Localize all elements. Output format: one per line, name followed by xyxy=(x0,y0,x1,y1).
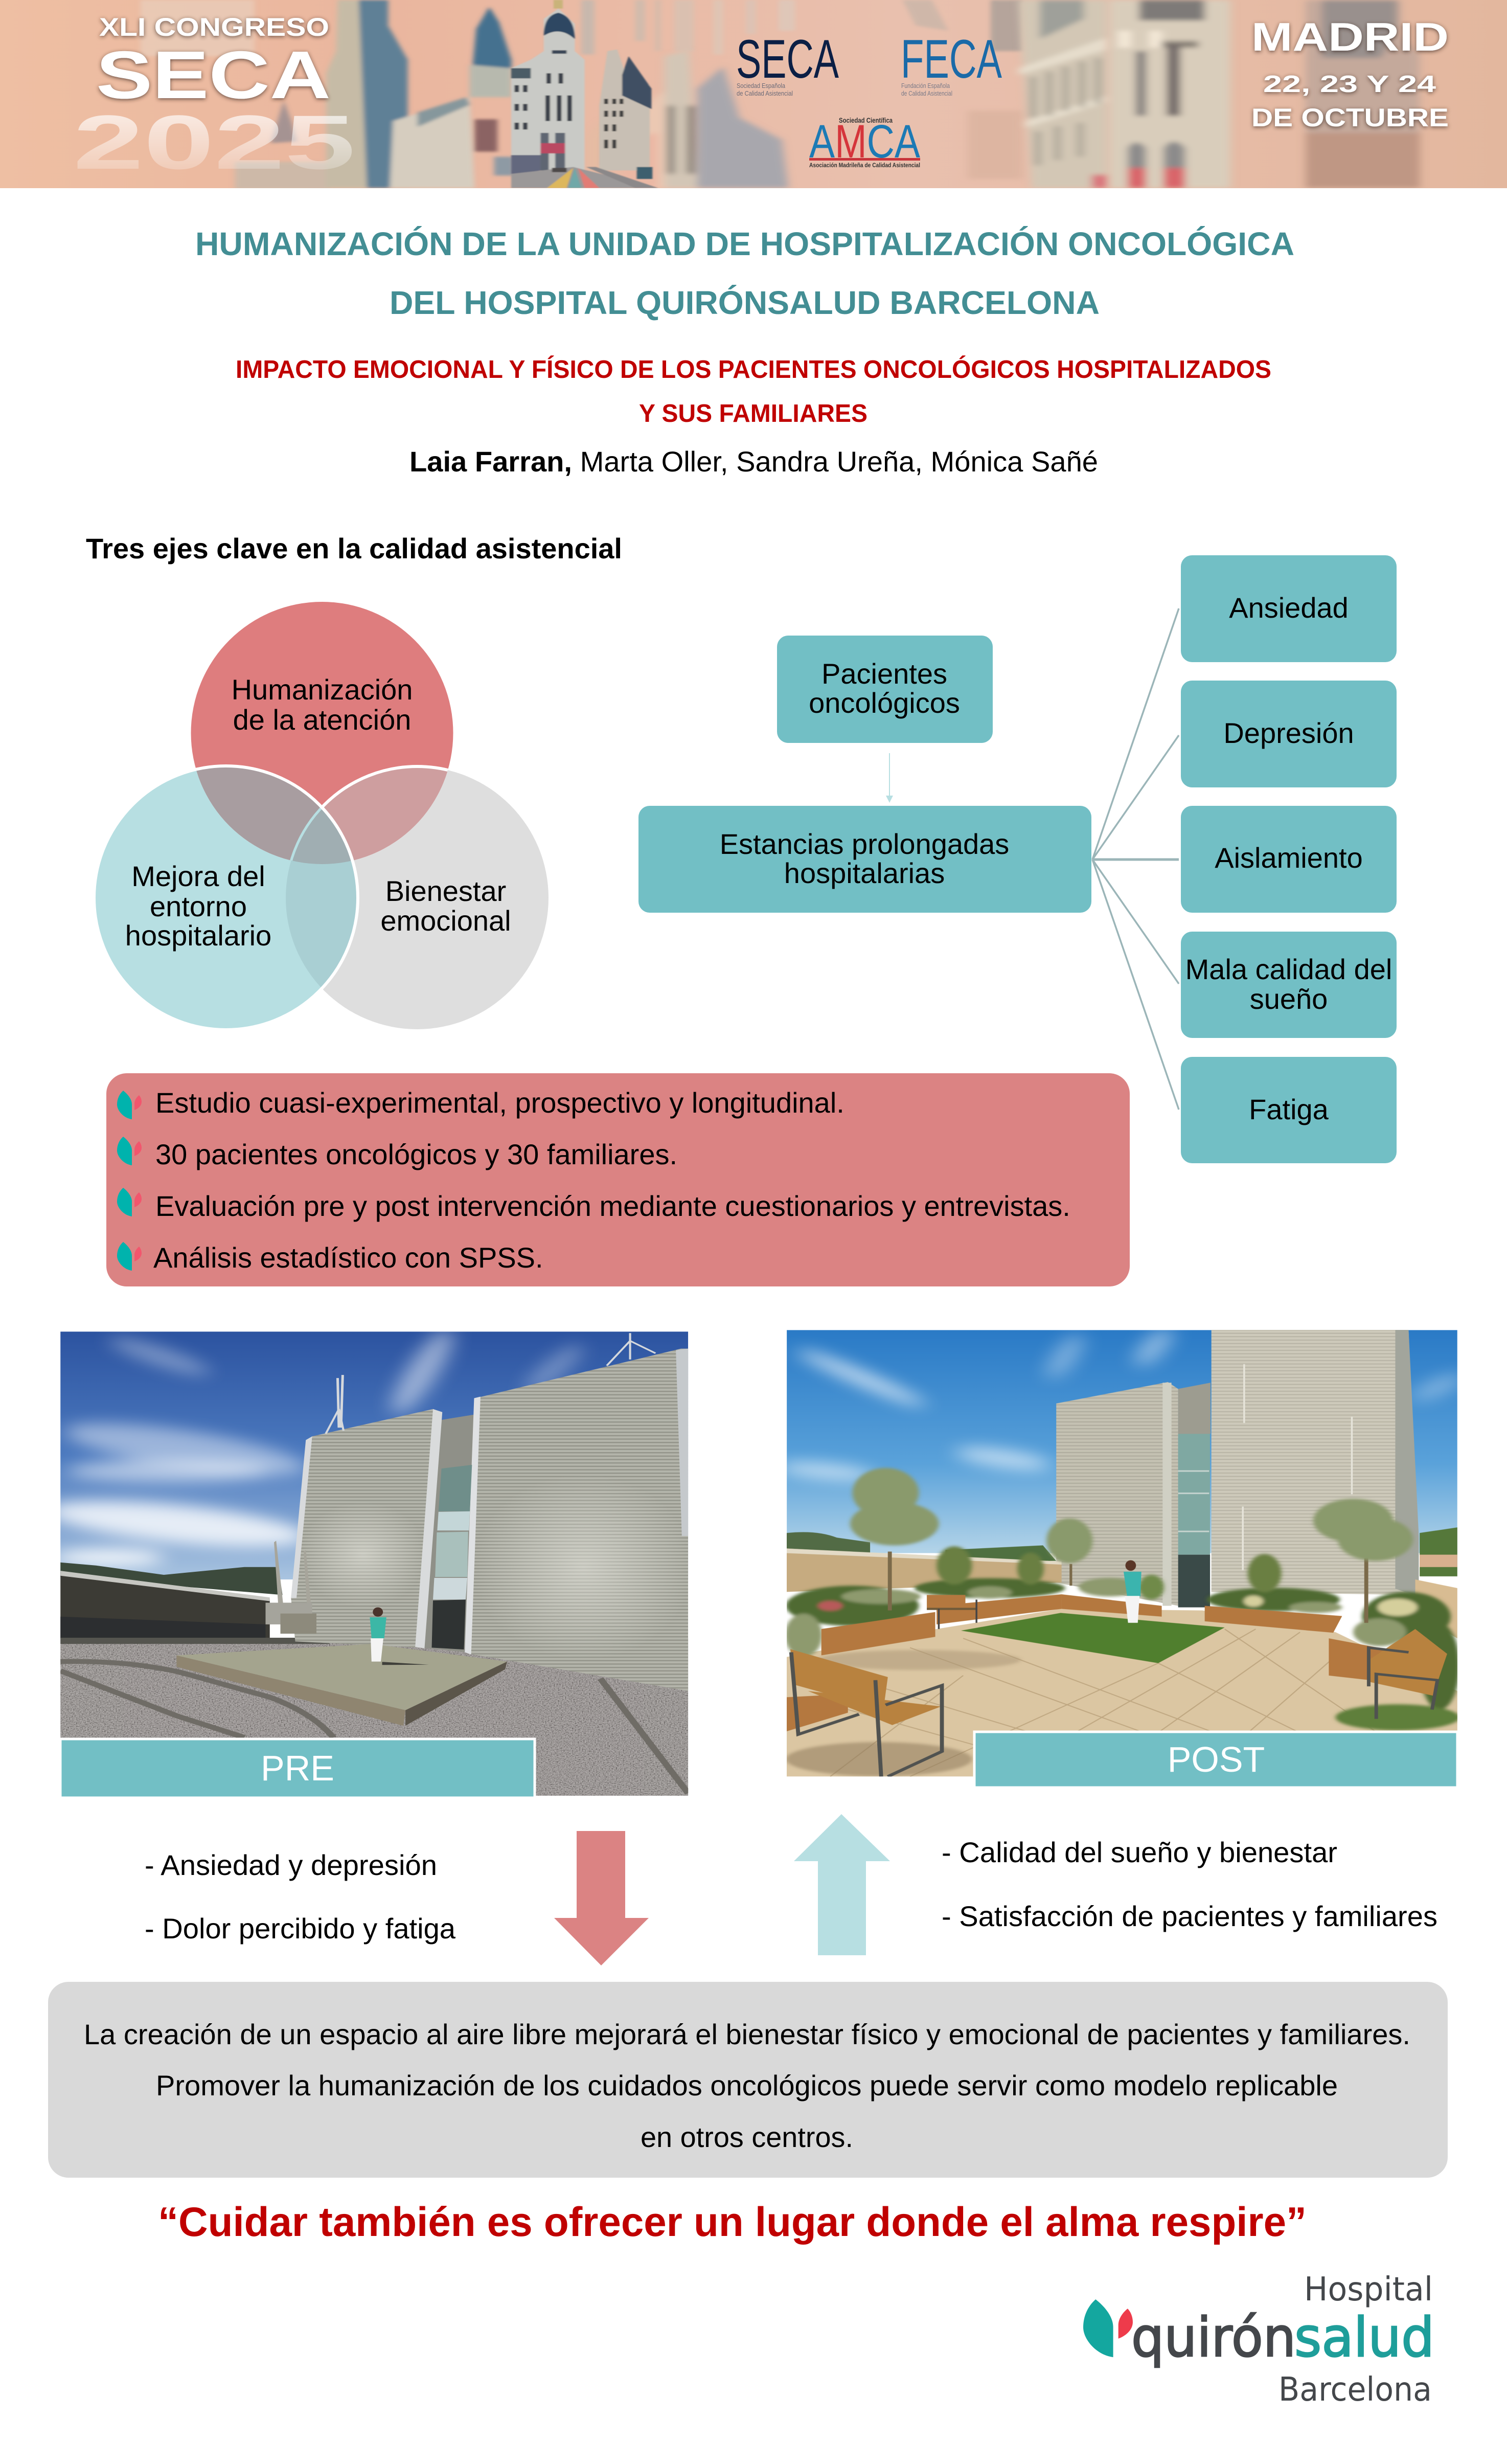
authors: Laia Farran, Marta Oller, Sandra Ureña, Mónica Sañé xyxy=(409,445,1098,478)
box: estancias prolongadas xyxy=(638,806,1091,913)
label: PRE xyxy=(60,1739,535,1798)
venn diagram xyxy=(94,602,549,1030)
planting xyxy=(785,1575,1459,1730)
trees xyxy=(850,1468,1413,1623)
flow diagram xyxy=(638,555,1397,1163)
box: mala calidad del sueño: sueño xyxy=(1250,983,1328,1015)
congress year: 2025 xyxy=(73,99,355,185)
logo: AMCA: Sociedad Científica xyxy=(839,116,893,124)
logo mark xyxy=(1083,2299,1133,2357)
rails xyxy=(60,1661,688,1793)
text: post outcomes xyxy=(942,1836,1437,1932)
box: aislamiento: Aislamiento xyxy=(1215,842,1363,874)
label: PRE: PRE xyxy=(261,1748,334,1788)
congress title: SECA xyxy=(96,37,331,112)
venn label: humanización: Humanización xyxy=(232,673,413,706)
arrow: down xyxy=(554,1831,649,1965)
text: pre outcomes: - Ansiedad y depresión xyxy=(145,1849,437,1881)
logo: SECA: Sociedad Española xyxy=(737,82,786,89)
congress title xyxy=(96,13,331,112)
logo: SECA: de Calidad Asistencial xyxy=(737,89,793,97)
platform xyxy=(176,1644,507,1710)
box: aislamiento xyxy=(1181,806,1397,913)
box: mala calidad del sueño xyxy=(1181,932,1397,1038)
venn label: humanización: de la atención xyxy=(233,704,411,736)
congress title: XLI CONGRESO xyxy=(99,13,329,41)
quote: “Cuidar también es ofrecer un lugar donde el alma respire” xyxy=(158,2199,1307,2245)
header illustration: Madrid buildings, right xyxy=(1019,0,1420,188)
subtitle: IMPACTO EMOCIONAL Y FÍSICO DE LOS PACIENTES ONCOLÓGICOS HOSPITALIZADOS xyxy=(236,355,1271,383)
photo: post intervention garden xyxy=(776,1325,1469,1776)
method item 4: Análisis estadístico con SPSS. xyxy=(153,1241,543,1274)
panel: methods xyxy=(106,1073,1130,1286)
venue and dates xyxy=(1251,14,1449,132)
panel: conclusion: en otros centros. xyxy=(641,2121,853,2153)
logo wordmark: quirón xyxy=(1131,2306,1296,2369)
facade xyxy=(1056,1382,1178,1606)
paving xyxy=(787,1609,1457,1776)
text: pre outcomes xyxy=(145,1849,456,1945)
panel: conclusion xyxy=(48,1982,1448,2178)
box: pacientes oncológicos xyxy=(777,636,993,743)
venn label: entorno: entorno xyxy=(150,890,247,922)
header banner xyxy=(0,0,1507,189)
lawn xyxy=(961,1613,1225,1663)
title: DEL HOSPITAL QUIRÓNSALUD BARCELONA xyxy=(390,284,1100,321)
logo: SECA xyxy=(736,28,839,97)
panel: conclusion: La creación de un espacio al aire libre mejorará el bienestar físico y emocional de pacientes y familiares. xyxy=(84,2018,1410,2050)
subtitle xyxy=(236,355,1271,427)
logo: FECA xyxy=(901,28,1002,97)
logo: FECA: FECA xyxy=(901,28,1002,89)
header illustration: Madrid buildings, left xyxy=(140,0,514,189)
benches xyxy=(790,1595,1447,1776)
box: pacientes oncológicos: oncológicos xyxy=(809,687,960,719)
venn label: bienestar xyxy=(380,875,511,937)
box: depresión xyxy=(1181,681,1397,787)
section heading: three axes: Tres ejes clave en la calidad asistencial xyxy=(86,532,622,564)
planters xyxy=(787,1594,1411,1731)
venue and dates: MADRID xyxy=(1251,14,1449,59)
antenna xyxy=(326,1333,655,1434)
box: mala calidad del sueño: Mala calidad del xyxy=(1185,953,1392,985)
method item 2: 30 pacientes oncológicos y 30 familiares. xyxy=(155,1138,677,1170)
logo: FECA: Fundación Española xyxy=(901,82,950,89)
box: ansiedad: Ansiedad xyxy=(1229,592,1349,624)
venn label: bienestar: Bienestar xyxy=(385,875,506,907)
method item 3: Evaluación pre y post intervención mediante cuestionarios y entrevistas. xyxy=(155,1190,1070,1222)
arrow: up xyxy=(794,1814,890,1955)
box: fatiga: Fatiga xyxy=(1249,1093,1329,1125)
venn label: entorno: hospitalario xyxy=(125,919,271,952)
bullet icon 4 xyxy=(117,1242,142,1271)
subtitle: Y SUS FAMILIARES xyxy=(639,400,867,427)
box: estancias prolongadas: Estancias prolongadas xyxy=(720,828,1009,860)
connector lines xyxy=(1092,608,1179,1110)
venn label: bienestar: emocional xyxy=(380,905,511,937)
venn label: entorno: Mejora del xyxy=(131,860,265,892)
bullet icon 2 xyxy=(117,1137,142,1165)
logo wordmark xyxy=(1131,2271,1434,2409)
label: POST: POST xyxy=(1168,1739,1265,1779)
venn label: humanización xyxy=(232,673,413,736)
logo: SECA: SECA xyxy=(736,28,839,89)
box: ansiedad xyxy=(1181,555,1397,662)
staff member xyxy=(1124,1560,1141,1623)
panel: conclusion: Promover la humanización de los cuidados oncológicos puede servir como modelo replicable xyxy=(156,2069,1338,2101)
photo: pre intervention rooftop xyxy=(43,1325,694,1796)
text: pre outcomes: - Dolor percibido y fatiga xyxy=(145,1912,456,1945)
logo wordmark: Hospital xyxy=(1304,2271,1433,2309)
staff member xyxy=(370,1608,429,1665)
garden wall xyxy=(787,1548,1062,1592)
box: fatiga xyxy=(1181,1057,1397,1163)
logo wordmark: salud xyxy=(1294,2306,1434,2369)
logo: AMCA: Asociación Madrileña de Calidad Asistencial xyxy=(809,162,920,169)
machine xyxy=(265,1541,316,1634)
method item 1: Estudio cuasi-experimental, prospectivo y longitudinal. xyxy=(155,1087,844,1119)
label: POST xyxy=(974,1732,1457,1788)
facade xyxy=(291,1409,442,1647)
arrow: patients to long stays xyxy=(886,753,893,803)
venue and dates: 22, 23 Y 24 xyxy=(1263,71,1436,97)
text: post outcomes: - Calidad del sueño y bienestar xyxy=(942,1836,1337,1868)
logo: AMCA: AMCA xyxy=(809,116,921,168)
venue and dates: DE OCTUBRE xyxy=(1251,103,1449,132)
logo: FECA: de Calidad Asistencial xyxy=(901,89,952,97)
title xyxy=(195,225,1294,321)
box: pacientes oncológicos: Pacientes xyxy=(821,658,947,690)
box: depresión: Depresión xyxy=(1223,717,1354,749)
title: HUMANIZACIÓN DE LA UNIDAD DE HOSPITALIZACIÓN ONCOLÓGICA xyxy=(195,225,1294,262)
header illustration: Madrid buildings, centre xyxy=(511,0,1022,188)
box: estancias prolongadas: hospitalarias xyxy=(784,857,945,889)
logo: hospital quirónsalud xyxy=(1083,2271,1434,2409)
text: post outcomes: - Satisfacción de pacientes y familiares xyxy=(942,1900,1437,1932)
venn label: entorno xyxy=(125,860,271,952)
bullet icon 1 xyxy=(117,1091,142,1119)
logo wordmark: Barcelona xyxy=(1278,2371,1432,2409)
bullet icon 3 xyxy=(117,1188,142,1216)
